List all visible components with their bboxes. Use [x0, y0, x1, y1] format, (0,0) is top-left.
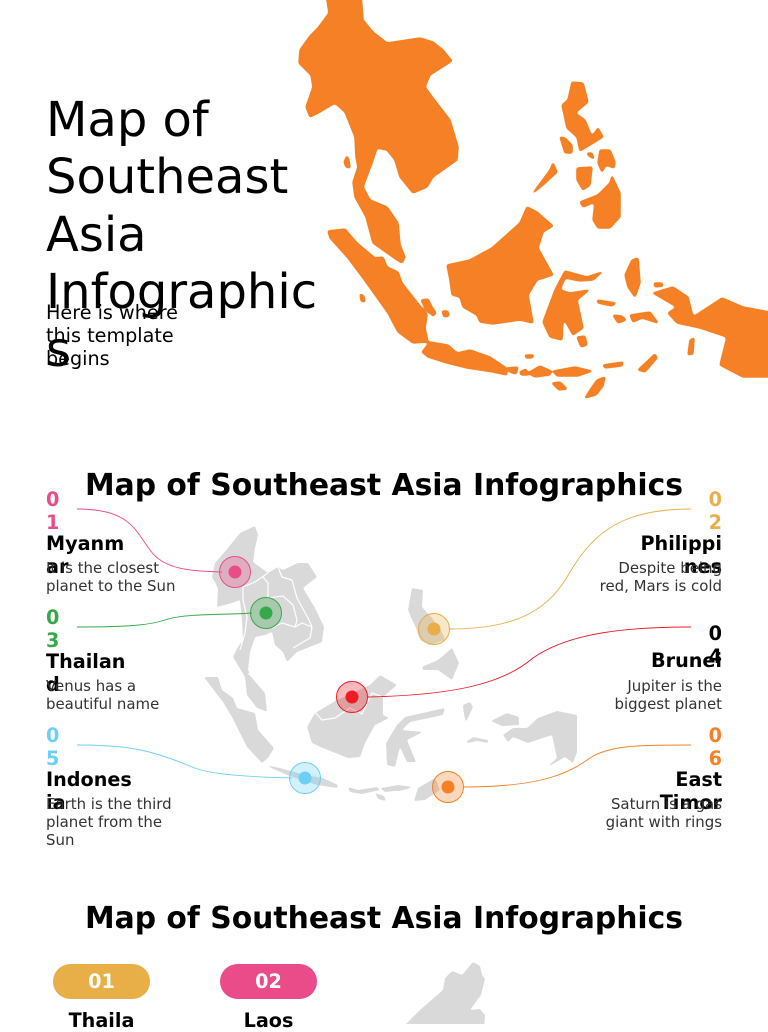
label 03 Thailand: beautiful name [46, 695, 159, 713]
label 01 Myanmar: ar [46, 555, 68, 578]
label 06 East Timor: Timor [660, 791, 722, 814]
label 06 East Timor: 0 [709, 724, 722, 746]
label 05 Indonesia: ia [46, 791, 66, 814]
label 05 Indonesia: planet from the [46, 813, 162, 831]
label 03 Thailand: 0 [46, 606, 59, 628]
subtitle: this template [46, 324, 174, 347]
leader line cyan [77, 745, 292, 778]
marker green [250, 598, 282, 628]
label 01 Myanmar: It is the closest [46, 559, 159, 577]
pill 01 [53, 964, 150, 999]
name Laos: Laos [244, 1008, 293, 1032]
label 04 Brunei: 0 [709, 622, 722, 645]
page title: Map of [46, 92, 209, 148]
label 06 East Timor [606, 724, 722, 831]
section heading: locations: Map of Southeast Asia Infographics [85, 468, 683, 503]
leader line yellow [450, 509, 691, 629]
label 03 Thailand: Venus has a [46, 677, 136, 695]
label 04 Brunei: Brunei [651, 649, 722, 672]
subtitle: Here is where [46, 300, 178, 324]
marker orange [432, 772, 464, 802]
pill 02: 02 [255, 970, 282, 993]
label 02 Philippines: nes [684, 555, 722, 578]
marker yellow [418, 614, 450, 644]
label 01 Myanmar: 0 [46, 488, 59, 510]
marker cyan [290, 762, 320, 794]
label 02 Philippines: red, Mars is cold [600, 577, 722, 595]
label 04 Brunei: 4 [709, 645, 722, 668]
label 05 Indonesia: 5 [46, 747, 59, 770]
leader line pink [77, 509, 222, 572]
label 01 Myanmar [46, 488, 175, 595]
label 02 Philippines: Despite being [618, 559, 722, 577]
subtitle: begins [46, 347, 110, 370]
marker pink [220, 556, 250, 588]
label 06 East Timor: giant with rings [606, 813, 722, 831]
label 06 East Timor: 6 [709, 747, 722, 770]
label 02 Philippines [600, 488, 722, 595]
label 04 Brunei: Jupiter is the [627, 677, 722, 695]
label 01 Myanmar: 1 [46, 511, 59, 534]
pill 02 [220, 964, 317, 999]
label 02 Philippines: 2 [709, 511, 722, 534]
label 02 Philippines: 0 [709, 488, 722, 510]
label 04 Brunei: biggest planet [615, 695, 722, 713]
label 05 Indonesia: Sun [46, 831, 74, 849]
leader line green [77, 613, 252, 627]
marker red [336, 682, 368, 712]
label 05 Indonesia: 0 [46, 724, 59, 746]
label 05 Indonesia [46, 724, 172, 849]
label 05 Indonesia: Earth is the third [46, 795, 172, 813]
label 03 Thailand: Thailan [46, 650, 125, 673]
subtitle [46, 300, 178, 370]
label 01 Myanmar: planet to the Sun [46, 577, 175, 595]
name Thailand cropped: Thaila [69, 1008, 134, 1032]
leader line orange [463, 745, 691, 787]
page title: Southeast [46, 149, 288, 205]
label 03 Thailand: 3 [46, 629, 59, 652]
label 03 Thailand: d [46, 673, 60, 696]
page title: Infographic [46, 264, 317, 320]
label 06 East Timor: Saturn is a gas [611, 795, 722, 813]
label 03 Thailand [46, 606, 159, 713]
label 02 Philippines: Philippi [640, 532, 722, 555]
page title: s [46, 322, 71, 378]
pill 01: 01 [88, 970, 115, 993]
leader line red [368, 627, 691, 697]
label 04 Brunei [615, 622, 722, 713]
label 06 East Timor: East [675, 768, 722, 791]
section heading: ranking: Map of Southeast Asia Infographics [85, 901, 683, 936]
page title: Asia [46, 207, 147, 263]
label 01 Myanmar: Myanm [46, 532, 124, 555]
label 05 Indonesia: Indones [46, 768, 132, 791]
page title [46, 92, 317, 378]
